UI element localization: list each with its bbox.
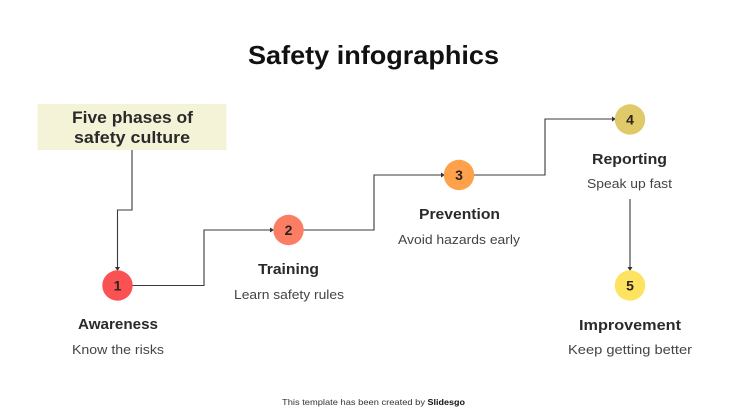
phase 3: prevention bbox=[398, 160, 521, 247]
arrow: phase 1 to phase 2 bbox=[132, 228, 274, 286]
phase 4: reporting: Speak up fast bbox=[587, 177, 673, 191]
arrow: phase 4 to phase 5 bbox=[628, 199, 632, 271]
phase 2: training: Learn safety rules bbox=[234, 288, 344, 302]
phase 1: awareness: Know the risks bbox=[72, 343, 164, 357]
phase 1: awareness bbox=[72, 270, 164, 357]
phase 5: improvement: Improvement bbox=[579, 318, 681, 334]
footer credit: Slidesgo bbox=[428, 397, 465, 407]
phase 4: reporting: 4 bbox=[626, 112, 634, 128]
phase 4: reporting bbox=[587, 104, 673, 191]
callout: five phases of safety culture: Five phases of bbox=[72, 108, 193, 127]
phase 1: awareness: 1 bbox=[114, 278, 122, 294]
phase 1: awareness: Awareness bbox=[78, 317, 158, 333]
phase 2: training: Training bbox=[258, 262, 319, 278]
arrow: phase 3 to phase 4 bbox=[474, 116, 616, 175]
phase 5: improvement: 5 bbox=[626, 278, 634, 294]
callout: five phases of safety culture bbox=[38, 104, 226, 150]
arrow: phase 2 to phase 3 bbox=[303, 172, 445, 230]
phase 5: improvement: Keep getting better bbox=[568, 343, 692, 357]
phase 3: prevention: Prevention bbox=[419, 207, 500, 223]
callout: five phases of safety culture: safety culture bbox=[74, 128, 190, 147]
phase 3: prevention: Avoid hazards early bbox=[398, 233, 521, 247]
title: Safety infographics bbox=[248, 40, 499, 70]
phase 5: improvement bbox=[568, 270, 692, 357]
phase 3: prevention: 3 bbox=[455, 167, 463, 183]
phase 4: reporting: Reporting bbox=[592, 152, 667, 168]
footer credit: This template has been created by bbox=[282, 397, 426, 407]
phase 2: training: 2 bbox=[285, 222, 293, 238]
arrow: callout to phase 1 bbox=[115, 150, 132, 271]
phase 2: training bbox=[234, 215, 344, 302]
